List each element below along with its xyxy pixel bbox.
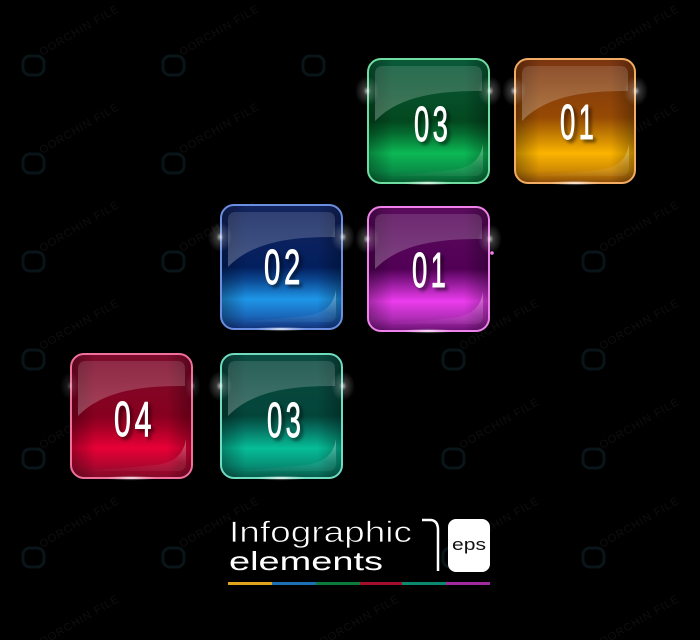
- watermark pattern: OORCHIN FILE: [458, 297, 542, 353]
- watermark pattern: OORCHIN FILE: [178, 495, 262, 551]
- number 03: 03: [414, 98, 451, 152]
- watermark pattern: OORCHIN FILE: [38, 297, 122, 353]
- tile: purple 01: [355, 207, 502, 334]
- number 01: 01: [412, 244, 449, 298]
- heading: Infographic elements: Infographic: [229, 516, 412, 549]
- watermark pattern: OORCHIN FILE: [598, 495, 682, 551]
- watermark pattern: OORCHIN FILE: [38, 3, 122, 59]
- watermark pattern: OORCHIN FILE: [38, 199, 122, 255]
- watermark pattern: OORCHIN FILE: [178, 101, 262, 157]
- tile: green 03: [355, 59, 502, 186]
- watermark pattern: OORCHIN FILE: [38, 101, 122, 157]
- watermark pattern: OORCHIN FILE: [458, 396, 542, 452]
- watermark pattern: OORCHIN FILE: [178, 3, 262, 59]
- number 02: 02: [264, 239, 304, 295]
- heading: Infographic elements: [229, 516, 412, 576]
- watermark pattern: OORCHIN FILE: [458, 495, 542, 551]
- watermark pattern: OORCHIN FILE: [598, 101, 682, 157]
- tile: teal 03: [208, 354, 355, 480]
- colour stripe: [228, 582, 490, 585]
- icon: numeral 10 eps badge: eps: [452, 535, 486, 554]
- watermark pattern: OORCHIN FILE: [598, 297, 682, 353]
- watermark pattern: OORCHIN FILE: [38, 495, 122, 551]
- tile: blue 02: [208, 205, 355, 332]
- watermark pattern: OORCHIN FILE: [178, 199, 262, 255]
- heading: Infographic elements: elements: [229, 546, 383, 576]
- tile: orange 01: [502, 59, 648, 186]
- number 01: 01: [560, 96, 597, 150]
- watermark pattern: OORCHIN FILE: [598, 199, 682, 255]
- tile: red 04: [60, 354, 201, 480]
- watermark pattern: OORCHIN FILE: [38, 396, 122, 452]
- number 04: 04: [114, 392, 155, 447]
- number 03: 03: [267, 394, 304, 448]
- icon: numeral 10 eps badge: [422, 519, 490, 572]
- watermark pattern: OORCHIN FILE: [598, 396, 682, 452]
- watermark pattern: OORCHIN FILE: [598, 3, 682, 59]
